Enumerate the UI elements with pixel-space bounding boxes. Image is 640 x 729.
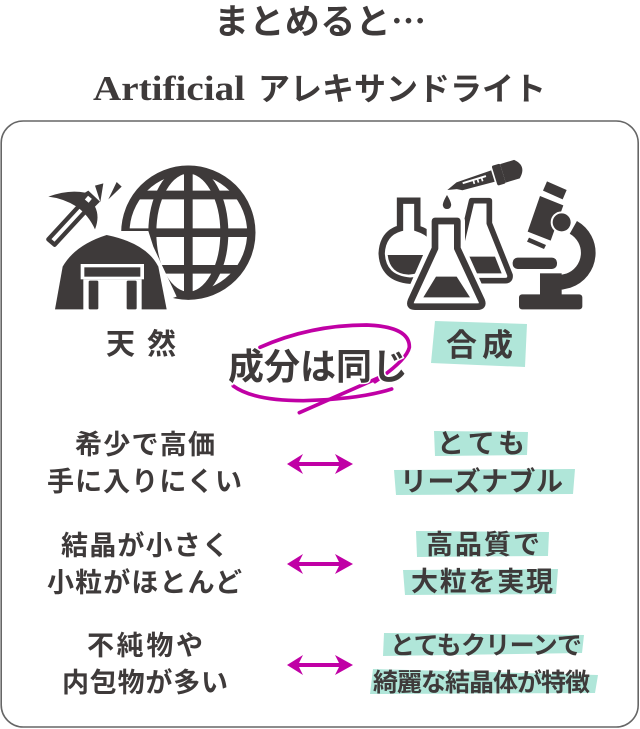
row 1: synthetic text: とても bbox=[437, 429, 525, 459]
row 3: natural text: 不純物や bbox=[87, 631, 203, 661]
row 3: synthetic text: 綺麗な結晶体が特徴 bbox=[373, 668, 590, 697]
row 3: natural text: 内包物が多い bbox=[62, 667, 228, 698]
row 2: synthetic text: 高品質で bbox=[426, 530, 540, 560]
row 3: arrow bbox=[287, 655, 353, 675]
icon: flasks and microscope bbox=[382, 158, 588, 309]
row 1: natural text bbox=[47, 430, 242, 497]
row 2: synthetic text: 大粒を実現 bbox=[411, 567, 553, 597]
row 2: synthetic text bbox=[403, 530, 558, 597]
row 1: arrow bbox=[287, 454, 353, 474]
highlight label: synthetic bbox=[431, 321, 527, 367]
icon: mine and globe bbox=[48, 168, 251, 317]
callout: same composition: 成分は同じ bbox=[228, 346, 408, 387]
row 3: natural text bbox=[62, 631, 228, 698]
row 3: synthetic text bbox=[370, 632, 598, 697]
row 2: natural text: 小粒がほとんど bbox=[47, 567, 242, 598]
row 1: natural text: 手に入りにくい bbox=[47, 467, 242, 497]
title: line 2 bbox=[93, 69, 546, 108]
label: natural: 天然 bbox=[106, 328, 176, 361]
row 2: natural text: 結晶が小さく bbox=[61, 530, 229, 561]
row 1: synthetic text bbox=[394, 429, 575, 497]
highlight label: synthetic: 合成 bbox=[446, 328, 513, 363]
title: line 2: Artificial bbox=[93, 69, 245, 108]
row 1: synthetic text: リーズナブル bbox=[400, 466, 563, 497]
row 1: natural text: 希少で高価 bbox=[75, 430, 215, 460]
row 3: synthetic text: とてもクリーンで bbox=[390, 632, 582, 660]
row 2: natural text bbox=[47, 530, 242, 598]
title: line 2: アレキサンドライト bbox=[258, 71, 546, 107]
row 2: arrow bbox=[287, 554, 353, 574]
callout: same composition bbox=[228, 325, 409, 413]
